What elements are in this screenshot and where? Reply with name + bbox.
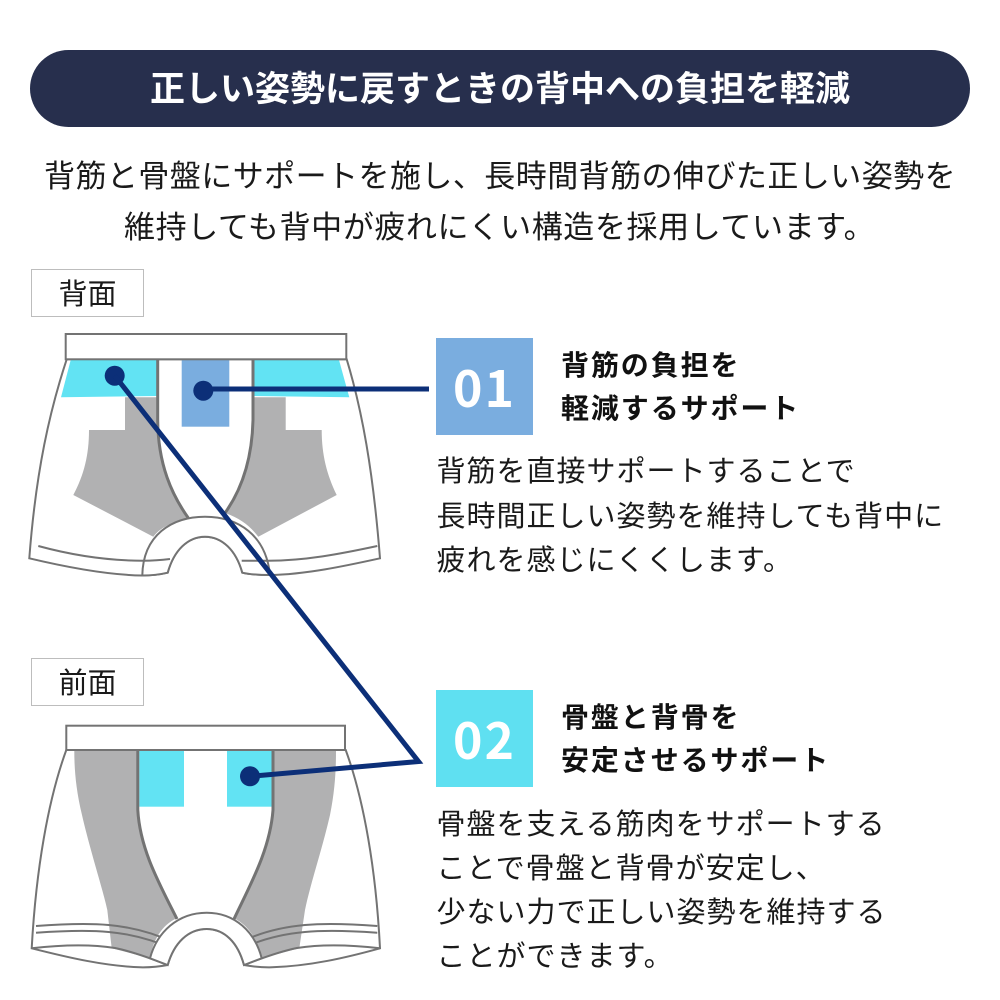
waistband: back bbox=[66, 334, 346, 359]
callout line: point 01 bbox=[193, 381, 429, 401]
heading 02 bbox=[561, 702, 830, 776]
body text 02: ことで骨盤と背骨が安定し、 bbox=[436, 853, 826, 885]
intro text: 背筋と骨盤にサポートを施し、長時間背筋の伸びた正しい姿勢を bbox=[44, 159, 956, 194]
outline: back shorts body bbox=[29, 359, 380, 576]
hem lines: back bbox=[38, 546, 170, 561]
crotch arches: front bbox=[150, 913, 262, 965]
title banner: 正しい姿勢に戻すときの背中への負担を軽減 bbox=[150, 70, 850, 109]
heading 01: 軽減するサポート bbox=[561, 393, 800, 424]
centre seams: back bbox=[158, 360, 188, 518]
cyan panels: back bbox=[61, 360, 349, 397]
body text 01 bbox=[436, 456, 944, 577]
crotch arches: back bbox=[142, 517, 270, 576]
body text 02 bbox=[436, 809, 887, 973]
intro text: 維持しても背中が疲れにくい構造を採用しています。 bbox=[124, 210, 875, 245]
body text 01: 背筋を直接サポートすることで bbox=[436, 456, 856, 488]
body text 02: ことができます。 bbox=[436, 941, 674, 973]
gray panels: front bbox=[74, 751, 336, 958]
hem stripes: front bbox=[36, 924, 173, 942]
blue panel: back centre bbox=[182, 360, 229, 427]
number badge 02 bbox=[436, 690, 533, 787]
heading 01: 背筋の負担を bbox=[561, 350, 740, 381]
hem lens: front bbox=[32, 945, 168, 965]
number badge 01 bbox=[436, 338, 533, 435]
label: front view: 前面 bbox=[58, 668, 116, 700]
body text 01: 疲れを感じにくくします。 bbox=[436, 545, 793, 577]
heading 01 bbox=[561, 350, 800, 424]
label: front view bbox=[31, 658, 144, 706]
outline: front shorts body bbox=[32, 750, 380, 967]
gray panels: back bbox=[73, 397, 337, 537]
label: back view: 背面 bbox=[58, 279, 116, 311]
number badge 01: 01 bbox=[453, 350, 516, 422]
cyan panels: front bbox=[139, 751, 272, 807]
waistband: front bbox=[66, 726, 345, 750]
intro text bbox=[44, 159, 956, 245]
callout line: point 02 bbox=[105, 366, 418, 786]
title banner bbox=[30, 50, 970, 127]
centre seams: front bbox=[138, 751, 177, 919]
body text 02: 骨盤を支える筋肉をサポートする bbox=[436, 809, 886, 841]
heading 02: 骨盤と背骨を bbox=[561, 702, 740, 733]
body text 02: 少ない力で正しい姿勢を維持する bbox=[436, 897, 887, 929]
body text 01: 長時間正しい姿勢を維持しても背中に bbox=[436, 501, 944, 533]
heading 02: 安定させるサポート bbox=[561, 745, 830, 776]
label: back view bbox=[31, 269, 144, 317]
number badge 02: 02 bbox=[453, 702, 516, 774]
